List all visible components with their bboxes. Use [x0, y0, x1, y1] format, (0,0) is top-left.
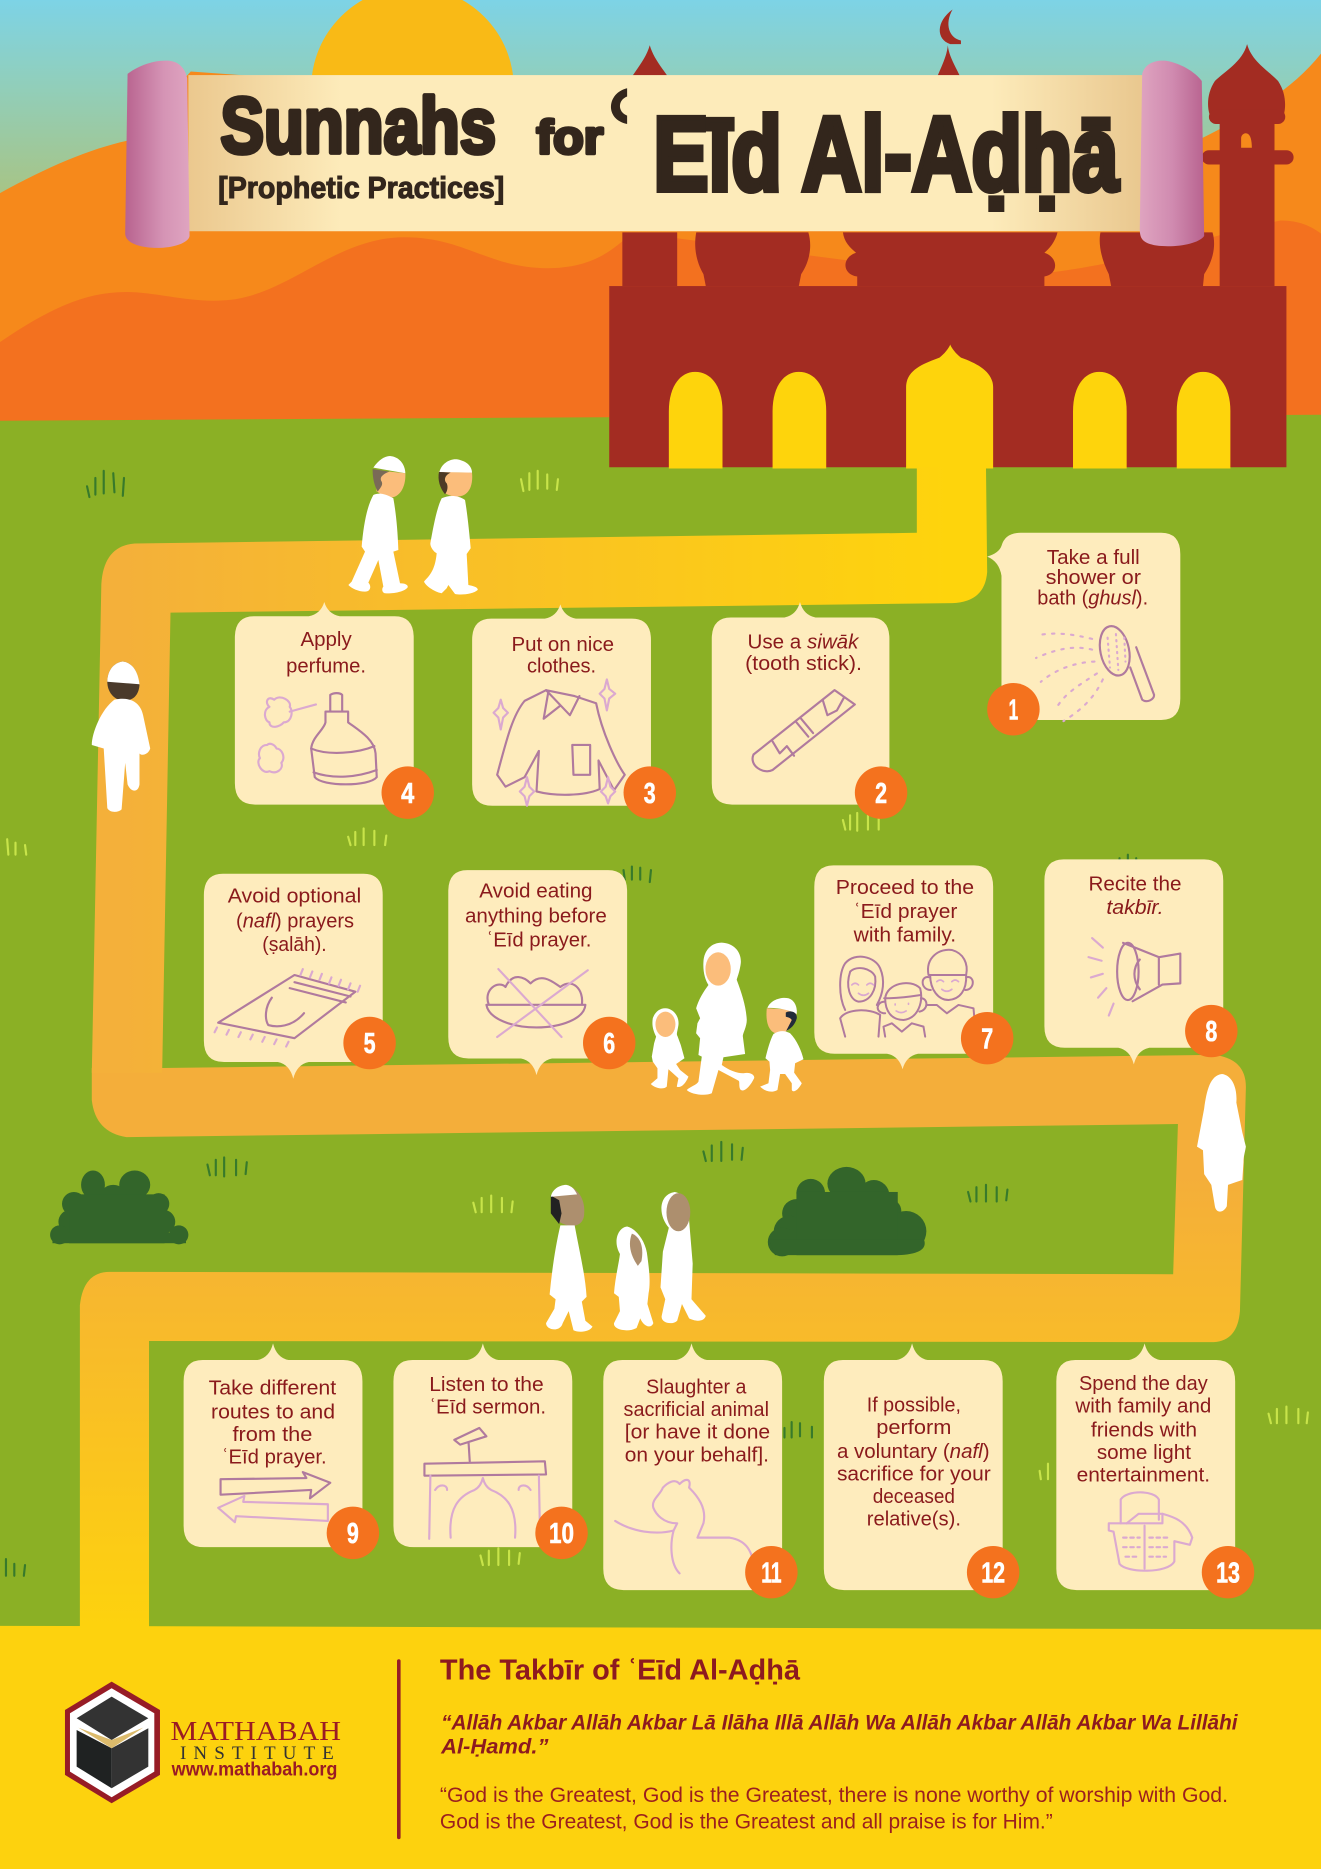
icon: crescent [940, 10, 961, 44]
text: step 5: (nafl) prayers [236, 910, 354, 932]
badge: 12: 12 [981, 1557, 1005, 1589]
text: step 10: Listen to the [429, 1374, 544, 1396]
text: step 8: Recite the [1089, 873, 1182, 895]
badge: 7 [961, 1012, 1013, 1064]
logo text: www.mathabah.org [171, 1759, 337, 1780]
text: step 7: with family. [853, 925, 956, 947]
text: step 7: ʿEīd prayer [854, 901, 958, 923]
figure: man walking down left path [92, 662, 150, 812]
footer background [0, 1626, 1321, 1869]
panel: step 8 recite takbir [1044, 859, 1238, 1064]
panel: step 6 avoid eating [448, 870, 635, 1075]
text: step 12: relative(s). [867, 1509, 961, 1531]
text: step 3 [511, 634, 614, 677]
icon: minbar with microphone [424, 1428, 546, 1539]
text: step 5: Avoid optional [228, 885, 361, 907]
sun [311, 0, 514, 190]
scroll: parchment [188, 75, 1145, 231]
text: step 4 [286, 629, 366, 677]
winding path [80, 467, 1246, 1628]
text: step 11: sacrificial animal [624, 1399, 769, 1421]
badge: 12 [967, 1546, 1019, 1598]
panel: step 10 listen to sermon [393, 1343, 588, 1559]
figure: woman walking right path [1197, 1074, 1246, 1212]
text: step 2 [745, 631, 862, 675]
badge: 8: 8 [1205, 1016, 1217, 1048]
text: step 12: If possible, [867, 1394, 961, 1416]
text: step 4: Apply [300, 629, 353, 651]
text: step 13: entertainment. [1077, 1465, 1210, 1487]
text: step 13: Spend the day [1079, 1373, 1209, 1395]
text: step 10: ʿEīd sermon. [429, 1397, 546, 1419]
badge: 5: 5 [364, 1028, 376, 1060]
panel: step 2 siwak [712, 602, 907, 819]
footer heading: The Takbīr of ʿEīd Al-Aḍḥā [440, 1654, 801, 1686]
bush: left [50, 1171, 188, 1244]
badge: 5 [343, 1017, 396, 1069]
badge: 13 [1202, 1546, 1254, 1598]
text: step 9: routes to and [211, 1401, 335, 1423]
badge: 13: 13 [1216, 1557, 1240, 1589]
heading: Sunnahs: Sunnahs [221, 82, 496, 170]
figures: family on lower path [546, 1185, 706, 1332]
divider: footer vertical rule [397, 1659, 401, 1839]
badge: 9 [327, 1507, 379, 1559]
icon: family portrait [840, 950, 975, 1037]
grass tufts [6, 471, 1308, 1576]
panel: step 1 take a shower [987, 533, 1180, 735]
sky background [0, 0, 1321, 238]
badge: 11 [745, 1546, 798, 1598]
text: step 11 [624, 1376, 770, 1466]
text: step 11: Slaughter a [646, 1376, 747, 1398]
footer transliteration: Al-Ḥamd.” [440, 1734, 549, 1758]
text: step 7 [836, 877, 974, 947]
background hill: light orange [0, 54, 1321, 429]
badge: 1 [987, 683, 1040, 735]
badge: 6: 6 [603, 1028, 615, 1060]
footer transliteration [440, 1711, 1239, 1758]
badge: 8 [1185, 1005, 1238, 1057]
heading: Eid Al-Adha: Eīd Al-Aḍḥā [653, 96, 1119, 213]
icon: sparkles [494, 679, 615, 806]
icon: sheep [615, 1480, 755, 1573]
text: step 2: Use a siwāk [748, 631, 859, 653]
badge: 4: 4 [401, 778, 414, 810]
panel: step 5 avoid optional prayers [204, 874, 396, 1079]
text: step 6 [465, 881, 607, 951]
text: step 12: a voluntary (nafl) [837, 1441, 990, 1463]
logo: Mathabah hexagon cube [65, 1682, 160, 1803]
badge: 9: 9 [347, 1518, 359, 1550]
icon: arrows both ways [218, 1472, 330, 1522]
text: step 8 [1089, 873, 1182, 919]
panel: step 9 different routes [184, 1343, 379, 1559]
badge: 4 [382, 766, 434, 819]
text: step 9: ʿEīd prayer. [222, 1447, 327, 1469]
text: step 12: deceased [873, 1486, 955, 1508]
text: step 12 [837, 1394, 991, 1531]
badge: 11: 11 [761, 1557, 782, 1589]
icon: spray clouds [258, 697, 316, 772]
panel: step 12 voluntary sacrifice [824, 1343, 1019, 1598]
badge: 6 [583, 1017, 635, 1069]
text: step 3: Put on nice [511, 634, 614, 656]
figures: two men walking [348, 456, 478, 594]
text: step 7: Proceed to the [836, 877, 974, 899]
text: step 1: bath (ghusl). [1037, 587, 1148, 609]
text: step 6: anything before [465, 906, 607, 928]
text: step 1: shower or [1046, 567, 1141, 589]
text: step 12: perform [876, 1417, 951, 1439]
panel: step 3 nice clothes [472, 604, 676, 819]
grass field [0, 415, 1321, 1633]
heading: for: for [537, 112, 603, 165]
logo text: MATHABAH [170, 1716, 341, 1746]
text: step 1: Take a full [1047, 547, 1140, 569]
text: step 5: (ṣalāh). [262, 934, 327, 956]
footer translation: “God is the Greatest, God is the Greatest, there is none worthy of worship with God. [440, 1783, 1228, 1807]
footer translation: God is the Greatest, God is the Greatest and all praise is for Him.” [440, 1809, 1053, 1833]
badge: 1: 1 [1009, 694, 1018, 726]
text: step 11: on your behalf]. [625, 1444, 769, 1466]
text: step 6: Avoid eating [479, 881, 593, 903]
icon: crossed out bowl [486, 969, 588, 1037]
logo text: INSTITUTE [180, 1743, 334, 1764]
icon: picnic basket [1109, 1492, 1192, 1571]
text: step 3: clothes. [527, 655, 596, 677]
panel: step 7 proceed with family [814, 865, 1013, 1069]
text: step 1 [1037, 547, 1148, 609]
text: step 6: ʿEīd prayer. [486, 929, 591, 951]
text: step 13: friends with [1091, 1419, 1197, 1441]
title banner [125, 61, 1204, 248]
icon: megaphone [1089, 938, 1180, 1016]
panel: step 13 family and friends [1056, 1343, 1254, 1598]
text: step 9: from the [232, 1424, 312, 1446]
text: step 5 [228, 885, 361, 956]
background hill: dark orange [0, 221, 1321, 429]
minaret dome [1208, 44, 1285, 123]
badge: 7: 7 [981, 1023, 993, 1055]
subheading: Prophetic Practices: [Prophetic Practices] [218, 170, 504, 205]
badge: 10: 10 [549, 1518, 574, 1550]
text: step 9 [209, 1378, 337, 1469]
mosque [609, 10, 1294, 468]
footer transliteration: “Allāh Akbar Allāh Akbar Lā Ilāha Illā Allāh Wa Allāh Akbar Allāh Akbar Wa Lillāhi [441, 1711, 1239, 1735]
icon: perfume bottle [311, 693, 377, 784]
panel: step 4 perfume [235, 602, 434, 819]
icon: shower head [1036, 623, 1154, 721]
text: step 11: [or have it done [625, 1422, 770, 1444]
icon: prayer rug [215, 969, 360, 1047]
logo text [170, 1716, 341, 1780]
scroll: right roll [1140, 61, 1204, 246]
bush: right [768, 1167, 926, 1256]
text: step 10 [429, 1374, 546, 1419]
icon: shirt [497, 690, 625, 795]
text: step 2: (tooth stick). [745, 653, 862, 675]
text: step 8: takbīr. [1106, 897, 1164, 919]
badge: 2 [855, 766, 907, 819]
text: step 13 [1074, 1373, 1211, 1487]
figures: family of three [651, 943, 803, 1095]
footer translation [440, 1783, 1228, 1833]
badge: 3 [624, 766, 676, 819]
icon: tooth stick [753, 690, 855, 771]
badge: 10 [535, 1507, 588, 1559]
heading: ayn mark [611, 88, 627, 124]
text: step 13: some light [1097, 1442, 1191, 1464]
text: step 9: Take different [209, 1378, 337, 1400]
scroll: left roll [125, 61, 190, 248]
text: step 12: sacrifice for your [837, 1463, 991, 1485]
text: step 4: perfume. [286, 655, 366, 677]
badge: 3: 3 [644, 778, 656, 810]
text: step 13: with family and [1074, 1395, 1211, 1417]
badge: 2: 2 [875, 778, 887, 810]
panel: step 11 slaughter [603, 1343, 798, 1598]
